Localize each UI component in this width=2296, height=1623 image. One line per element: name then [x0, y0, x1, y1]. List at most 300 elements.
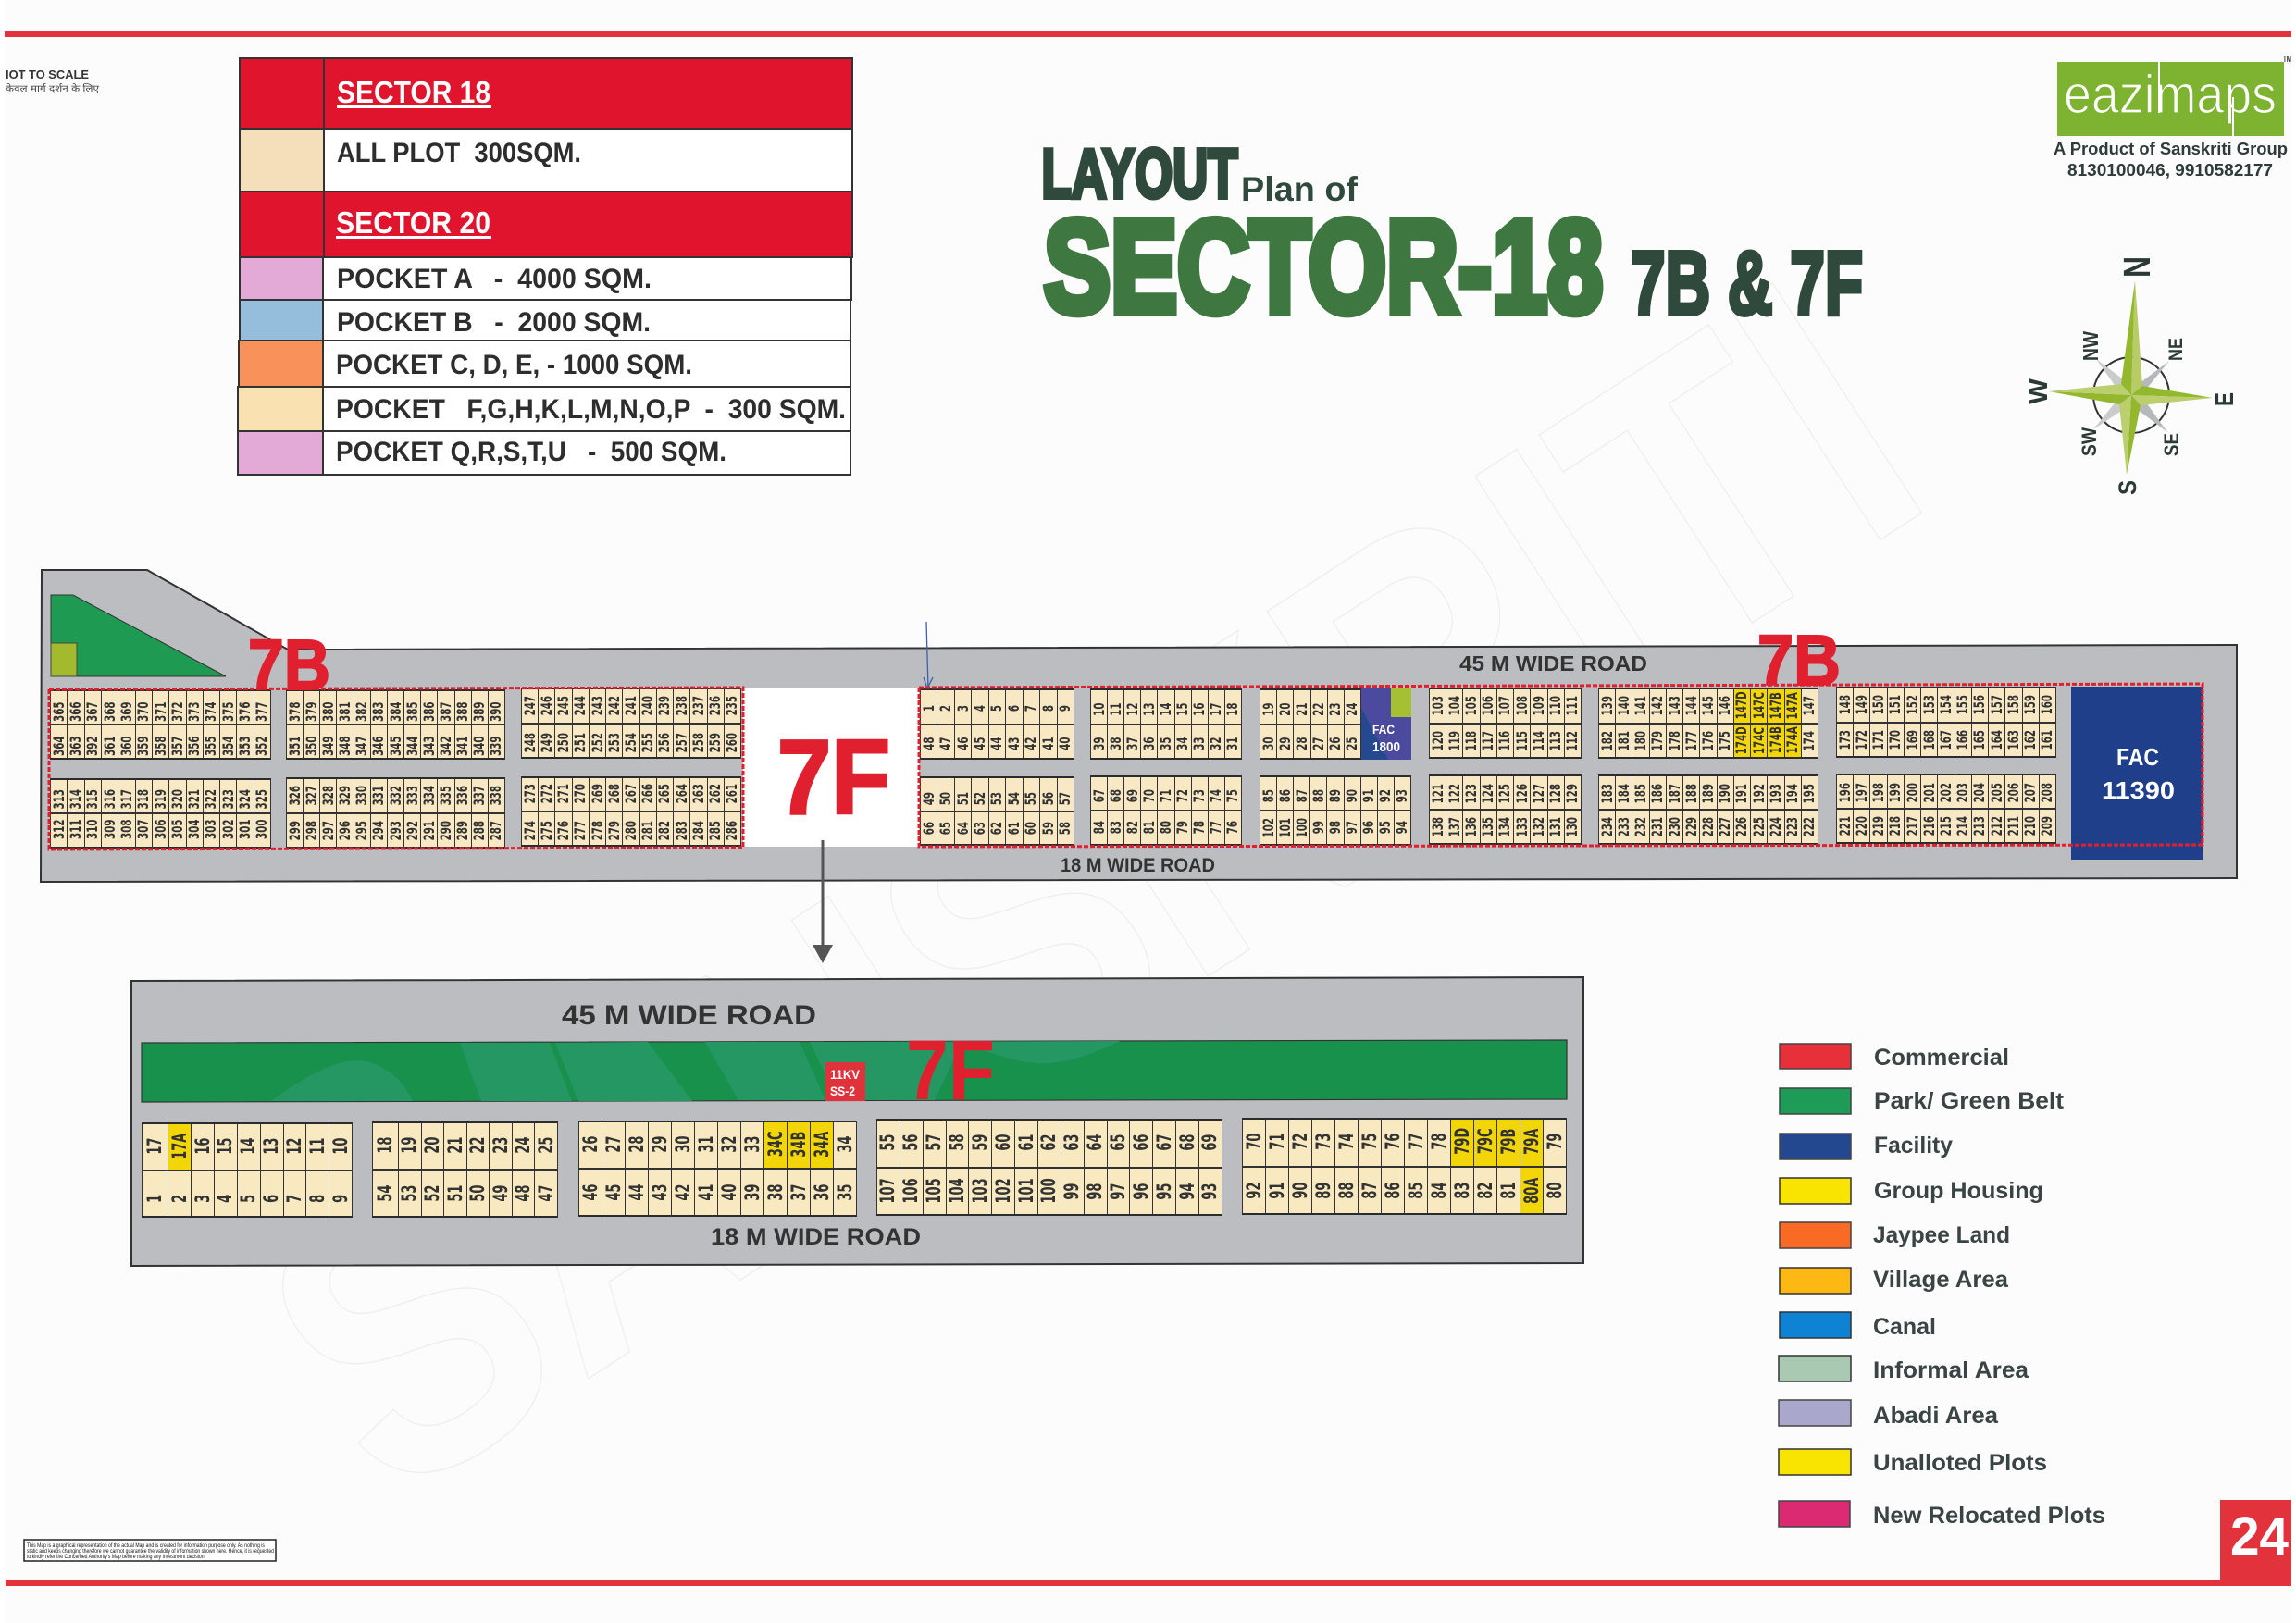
plot block: 19-24 and 30-25: 24: [1343, 702, 1360, 715]
road label: 18 m top: 18 M WIDE ROAD: [1061, 855, 1215, 876]
plot block: 67-75 and 84-76: 69: [1123, 789, 1141, 803]
plot block: 196-208 and 221-209: 208: [2038, 783, 2055, 802]
plot block: 148-160 and 173-161: 167: [1937, 730, 1955, 750]
plot block: 247-235 and 248-260: 245: [554, 696, 572, 715]
plot block: 326-338 and 299-287: 331: [369, 786, 387, 805]
plot block: 148-160 and 173-161: 153: [1920, 695, 1938, 714]
plot block: 313-325 and 312-300: 308: [118, 819, 135, 839]
plot block: 273-261 and 274-286: 285: [706, 821, 724, 840]
plot block: 49-57 and 66-58: 62: [987, 822, 1005, 835]
plot block: 183-195 and 234-222: 225: [1750, 817, 1768, 836]
plot block: 247-235 and 248-260: 238: [673, 696, 690, 715]
pocket B row: [240, 300, 850, 341]
plot block: 378-390 and 351-339: 347: [353, 736, 370, 756]
detail plot block: 70-79 and 92-80: 75: [1359, 1134, 1381, 1150]
detail plot block: 70-79 and 92-80: 91: [1266, 1182, 1288, 1198]
detail plot block: 26-34 and 46-35: 39: [740, 1183, 763, 1201]
plot block: 85-93 and 102-94: 86: [1276, 789, 1294, 803]
plot block: 196-208 and 221-209: 204: [1970, 783, 1988, 802]
plot block: 247-235 and 248-260: [521, 688, 741, 759]
plot block: 378-390 and 351-339: 383: [369, 701, 387, 722]
plot block: 326-338 and 299-287: 337: [470, 786, 488, 805]
plot block: 196-208 and 221-209: [1836, 774, 2056, 844]
detail plot block: 55-69 and 107-93: 93: [1198, 1183, 1221, 1199]
plot block: 148-160 and 173-161: 156: [1970, 695, 1988, 714]
detail plot block: 17-10 and 1-9: 17A: [168, 1133, 191, 1158]
plot block: 10-18 and 39-31: 10: [1090, 702, 1108, 715]
detail plot block: 18-25 and 54-47: 51: [444, 1184, 466, 1202]
detail plot block: 70-79 and 92-80: 79: [1544, 1134, 1566, 1150]
plot block: 326-338 and 299-287: 297: [319, 821, 337, 840]
plot block: 10-18 and 39-31: 33: [1190, 737, 1208, 750]
plot block: 1-9 and 48-40: 8: [1039, 705, 1057, 712]
plot block: 326-338 and 299-287: 330: [353, 786, 370, 805]
phone numbers: 8130100046, 9910582177: [2067, 161, 2273, 180]
plot block: 378-390 and 351-339: 385: [403, 701, 421, 722]
plot block: 139-147 and 182-174: 174: [1800, 731, 1818, 750]
plot block: 365-377 and 364-352: 354: [219, 736, 237, 756]
top red rule: [5, 31, 2291, 37]
detail plot block: 55-69 and 107-93: 66: [1130, 1134, 1152, 1151]
pocket Q to U row: [238, 431, 850, 475]
plot block: 148-160 and 173-161: 150: [1869, 695, 1887, 714]
plot block: 103-111 and 120-112: 111: [1563, 696, 1581, 715]
plot block: 313-325 and 312-300: 323: [219, 789, 237, 809]
legend: village area: [1780, 1267, 2009, 1294]
plot block: 139-147 and 182-174: 174A: [1783, 727, 1801, 754]
plot block: 148-160 and 173-161: 169: [1904, 730, 1921, 750]
plot block: 313-325 and 312-300: 317: [118, 789, 135, 809]
plot block: 365-377 and 364-352: 376: [236, 701, 254, 722]
plot block: 313-325 and 312-300: 320: [168, 789, 186, 809]
plot block: 273-261 and 274-286: 280: [622, 821, 639, 840]
detail plot block: 55-69 and 107-93: 96: [1130, 1183, 1152, 1199]
label: 7B west: 7B: [248, 626, 330, 705]
plot block: 247-235 and 248-260: 242: [605, 696, 623, 715]
plot block: 139-147 and 182-174: 174C: [1750, 727, 1768, 754]
plot block: 365-377 and 364-352: 361: [101, 736, 118, 756]
panel: 7F detail: [131, 977, 1583, 1266]
plot block: 326-338 and 299-287: 334: [420, 786, 438, 805]
label: 7F detail: 7F: [906, 1023, 995, 1118]
detail plot block: 55-69 and 107-93: 106: [900, 1179, 922, 1204]
plot block: 139-147 and 182-174: 142: [1648, 696, 1666, 715]
plot block: 326-338 and 299-287: 328: [319, 786, 337, 805]
plot block: 183-195 and 234-222: 188: [1682, 784, 1700, 803]
detail plot block: 17-10 and 1-9: 2: [168, 1195, 191, 1203]
plot block: 378-390 and 351-339: 388: [453, 701, 471, 722]
plot block: 103-111 and 120-112: 103: [1429, 696, 1446, 715]
plot block: 196-208 and 221-209: 214: [1954, 816, 1971, 836]
facility 1800: [1361, 688, 1411, 760]
detail plot block: 18-25 and 54-47: 47: [535, 1184, 557, 1202]
plot block: 139-147 and 182-174: 146: [1716, 696, 1733, 715]
plot block: 378-390 and 351-339: 380: [319, 701, 337, 722]
plot block: 85-93 and 102-94: 87: [1293, 789, 1310, 803]
plot block: 148-160 and 173-161: [1836, 687, 2056, 758]
plot block: 183-195 and 234-222: 231: [1648, 817, 1666, 836]
plot block: 183-195 and 234-222: 186: [1648, 784, 1666, 803]
plot block: 19-24 and 30-25: 19: [1260, 702, 1277, 715]
detail plot block: 55-69 and 107-93: 55: [876, 1134, 899, 1151]
panel: main road strip: [41, 570, 2237, 882]
plot block: 139-147 and 182-174: 147C: [1750, 692, 1768, 719]
plot block: 1-9 and 48-40: 2: [937, 705, 954, 712]
facility 1800: 1800: [1372, 739, 1400, 755]
plot block: 148-160 and 173-161: 162: [2021, 730, 2039, 750]
plot block: 378-390 and 351-339: 340: [470, 736, 488, 756]
detail plot block: 70-79 and 92-80: 78: [1427, 1134, 1449, 1150]
detail plot block: 55-69 and 107-93: 103: [969, 1179, 991, 1204]
detail plot block: 26-34 and 46-35: 26: [579, 1135, 602, 1153]
plot block: 196-208 and 221-209: 215: [1937, 816, 1955, 836]
plot block: 247-235 and 248-260: 250: [554, 733, 572, 752]
plot block: 85-93 and 102-94: 92: [1376, 789, 1394, 803]
detail plot block: 55-69 and 107-93: 99: [1061, 1183, 1083, 1199]
plot block: 365-377 and 364-352: 366: [67, 701, 84, 722]
plot block: 121-129 and 138-130: 121: [1429, 784, 1446, 803]
plot block: 121-129 and 138-130: 130: [1563, 817, 1581, 836]
plot block: 313-325 and 312-300: 316: [101, 789, 118, 809]
plot block: 10-18 and 39-31: 16: [1190, 702, 1208, 715]
plot block: 378-390 and 351-339: 344: [403, 736, 421, 756]
plot block: 326-338 and 299-287: 295: [353, 821, 370, 840]
plot block: 139-147 and 182-174: 143: [1666, 696, 1683, 715]
plot block: 49-57 and 66-58: 53: [987, 792, 1005, 805]
legend: new relocated plots: New Relocated Plots: [1873, 1503, 2105, 1529]
title: layout: LAYOUT: [1042, 135, 1238, 213]
plot block: 121-129 and 138-130: 138: [1429, 817, 1446, 836]
plot block: 378-390 and 351-339: 348: [336, 736, 354, 756]
plot block: 196-208 and 221-209: 211: [2004, 816, 2022, 836]
plot block: 313-325 and 312-300: 322: [202, 789, 219, 809]
plot block: 365-377 and 364-352: 359: [134, 736, 152, 756]
plot block: 183-195 and 234-222: 234: [1598, 817, 1616, 836]
plot block: 247-235 and 248-260: 251: [571, 733, 589, 752]
plot block: 10-18 and 39-31: 11: [1107, 702, 1124, 715]
plot block: 326-338 and 299-287: 336: [453, 786, 471, 805]
plot block: 196-208 and 221-209: 199: [1886, 783, 1904, 802]
plot block: 378-390 and 351-339: 386: [420, 701, 438, 722]
detail plot block: 18-25 and 54-47: 54: [374, 1184, 396, 1202]
detail plot block: 70-79 and 92-80: 74: [1334, 1134, 1357, 1150]
plot block: 139-147 and 182-174: 144: [1682, 696, 1700, 715]
plot block: 67-75 and 84-76: 82: [1123, 821, 1141, 835]
logo: eazimaps: eazimaps: [2064, 65, 2277, 125]
plot block: 10-18 and 39-31: 15: [1173, 702, 1191, 715]
plot block: 10-18 and 39-31: 39: [1090, 737, 1108, 750]
legend: group housing: Group Housing: [1874, 1178, 2043, 1204]
detail plot block: 55-69 and 107-93: 62: [1037, 1134, 1060, 1151]
plot block: 85-93 and 102-94: 101: [1276, 818, 1294, 837]
detail plot block: 55-69 and 107-93: 68: [1176, 1134, 1198, 1151]
legend: commercial: [1780, 1044, 2009, 1071]
plot block: 378-390 and 351-339: 349: [319, 736, 337, 756]
plot size table: [238, 58, 852, 475]
plot block: 139-147 and 182-174: 140: [1615, 696, 1632, 715]
plot block: 247-235 and 248-260: 260: [723, 733, 740, 752]
plot block: 326-338 and 299-287: 292: [403, 821, 421, 840]
icon: compass rose: S: [2114, 480, 2141, 495]
plot block: 121-129 and 138-130: 131: [1546, 817, 1564, 836]
plot block: 148-160 and 173-161: 166: [1954, 730, 1971, 750]
plot block: 247-235 and 248-260: 239: [655, 696, 673, 715]
plot block: 148-160 and 173-161: 157: [1988, 695, 2005, 714]
plot block: 121-129 and 138-130: [1429, 774, 1582, 845]
detail plot block: 55-69 and 107-93: 101: [1015, 1179, 1037, 1204]
plot block: 273-261 and 274-286: 269: [589, 784, 606, 803]
all plot row: ALL PLOT 300SQM.: [337, 138, 581, 168]
plot block: 313-325 and 312-300: 311: [67, 819, 84, 839]
detail plot block: 55-69 and 107-93: 102: [992, 1179, 1014, 1204]
plot block: 313-325 and 312-300: 305: [168, 819, 186, 839]
plot block: 247-235 and 248-260: 241: [622, 696, 639, 715]
plot block: 85-93 and 102-94: 91: [1359, 789, 1377, 803]
plot block: 326-338 and 299-287: 298: [303, 821, 320, 840]
plot block: 247-235 and 248-260: 248: [521, 733, 539, 752]
detail plot block: 55-69 and 107-93: 95: [1153, 1183, 1175, 1199]
plot block: 313-325 and 312-300: 313: [50, 789, 68, 809]
detail plot block: 17-10 and 1-9: 17: [143, 1137, 166, 1154]
plot block: 247-235 and 248-260: 256: [655, 733, 673, 752]
plot block: 85-93 and 102-94: 93: [1393, 789, 1410, 803]
legend: commercial: Commercial: [1874, 1045, 2009, 1071]
plot block: 49-57 and 66-58: 54: [1005, 792, 1023, 805]
plot block: 148-160 and 173-161: 173: [1836, 730, 1854, 750]
plot block: 273-261 and 274-286: 267: [622, 784, 639, 803]
detail plot block: 18-25 and 54-47: 49: [490, 1184, 512, 1202]
plot block: 49-57 and 66-58: 64: [954, 822, 972, 835]
plot block: 365-377 and 364-352: 369: [118, 701, 135, 722]
plot block: 183-195 and 234-222: 228: [1699, 817, 1717, 836]
detail plot block: 17-10 and 1-9: 14: [237, 1137, 259, 1154]
plot block: 148-160 and 173-161: 154: [1937, 695, 1955, 714]
plot block: 1-9 and 48-40: 4: [971, 705, 988, 712]
plot block: 196-208 and 221-209: 205: [1988, 783, 2005, 802]
facility 11390: FAC: [2116, 743, 2159, 771]
plot block: 247-235 and 248-260: 258: [689, 733, 707, 752]
plot block: 273-261 and 274-286: 279: [605, 821, 623, 840]
detail plot block: 26-34 and 46-35: 41: [694, 1183, 716, 1201]
detail plot block: 55-69 and 107-93: 94: [1176, 1183, 1198, 1199]
plot block: 326-338 and 299-287: 333: [403, 786, 421, 805]
pocket Q to U row: POCKET Q,R,S,T,U - 500 SQM.: [336, 437, 726, 467]
detail plot block: 70-79 and 92-80: 80: [1544, 1182, 1566, 1198]
detail plot block: 55-69 and 107-93: 63: [1061, 1134, 1083, 1151]
detail plot block: 70-79 and 92-80: 77: [1405, 1134, 1427, 1150]
plot block: 326-338 and 299-287: 291: [420, 821, 438, 840]
plot block: 10-18 and 39-31: 34: [1173, 737, 1191, 750]
plot block: 273-261 and 274-286: 272: [538, 784, 555, 803]
detail plot block: 70-79 and 92-80: [1242, 1118, 1567, 1215]
plot block: 103-111 and 120-112: 115: [1513, 731, 1531, 750]
pen mark: [924, 622, 933, 688]
plot block: 365-377 and 364-352: 358: [152, 736, 169, 756]
detail plot block: 18-25 and 54-47: 19: [398, 1136, 420, 1154]
plot block: 365-377 and 364-352: 353: [236, 736, 254, 756]
legend: jaypee land: Jaypee Land: [1873, 1222, 2010, 1248]
detail plot block: 18-25 and 54-47: 20: [421, 1136, 443, 1154]
plot block: 67-75 and 84-76: 83: [1107, 821, 1124, 835]
plot block: 1-9 and 48-40: 7: [1022, 705, 1039, 712]
title: plan of: Plan of: [1241, 170, 1359, 208]
plot block: 67-75 and 84-76: 76: [1223, 821, 1241, 835]
plot block: 196-208 and 221-209: 213: [1970, 816, 1988, 836]
plot block: 148-160 and 173-161: 170: [1886, 730, 1904, 750]
detail plot block: 70-79 and 92-80: 80A: [1520, 1177, 1542, 1203]
plot block: 196-208 and 221-209: 198: [1869, 783, 1887, 802]
legend: abadi area: Abadi Area: [1873, 1403, 1999, 1429]
plot block: 326-338 and 299-287: [286, 777, 505, 849]
plot block: 196-208 and 221-209: 207: [2021, 783, 2039, 802]
detail plot block: 26-34 and 46-35: 42: [672, 1183, 694, 1201]
legend: canal: Canal: [1873, 1314, 1936, 1340]
plot block: 183-195 and 234-222: 193: [1767, 784, 1784, 803]
plot block: 67-75 and 84-76: 77: [1207, 821, 1224, 835]
plot block: 49-57 and 66-58: 58: [1056, 822, 1074, 835]
plot block: 313-325 and 312-300: 321: [185, 789, 203, 809]
boundary: 7B west: [49, 688, 743, 849]
detail plot block: 26-34 and 46-35: 27: [602, 1135, 624, 1153]
company line: A Product of Sanskriti Group: [2054, 139, 2288, 158]
legend: facility: [1780, 1133, 1953, 1159]
page number tag: [2220, 1500, 2291, 1586]
detail plot block: 26-34 and 46-35: 29: [648, 1135, 670, 1153]
plot block: 121-129 and 138-130: 122: [1446, 784, 1463, 803]
detail plot block: 26-34 and 46-35: 34B: [787, 1131, 809, 1158]
substation 11KV SS-2: SS-2: [830, 1084, 855, 1098]
plot block: 273-261 and 274-286: 273: [521, 784, 539, 803]
plot block: 49-57 and 66-58: 50: [937, 792, 954, 805]
plot block: 183-195 and 234-222: 185: [1632, 784, 1649, 803]
detail plot block: 70-79 and 92-80: 90: [1288, 1182, 1310, 1198]
plot block: 148-160 and 173-161: 159: [2021, 695, 2039, 714]
detail plot block: 26-34 and 46-35: 36: [811, 1183, 833, 1201]
plot block: 10-18 and 39-31: [1090, 688, 1242, 760]
plot block: 121-129 and 138-130: 134: [1496, 817, 1513, 836]
pocket C D E row: [239, 341, 850, 387]
plot block: 1-9 and 48-40: 5: [987, 705, 1005, 712]
plot block: 326-338 and 299-287: 296: [336, 821, 354, 840]
plot block: 196-208 and 221-209: 209: [2038, 816, 2055, 836]
plot block: 85-93 and 102-94: 98: [1326, 821, 1344, 835]
detail plot block: 26-34 and 46-35: 46: [579, 1183, 602, 1201]
plot block: 273-261 and 274-286: 274: [521, 821, 539, 840]
plot block: 273-261 and 274-286: 283: [673, 821, 690, 840]
plot block: 148-160 and 173-161: 163: [2004, 730, 2022, 750]
plot block: 326-338 and 299-287: 338: [487, 786, 504, 805]
legend: facility: Facility: [1874, 1133, 1953, 1158]
icon: compass rose: W: [2024, 378, 2054, 404]
plot block: 313-325 and 312-300: 315: [83, 789, 101, 809]
plot block: 85-93 and 102-94: 102: [1260, 818, 1277, 837]
plot block: 273-261 and 274-286: 262: [706, 784, 724, 803]
plot block: 196-208 and 221-209: 217: [1904, 816, 1921, 836]
detail plot block: 70-79 and 92-80: 70: [1242, 1134, 1264, 1150]
plot block: 67-75 and 84-76: 79: [1173, 821, 1191, 835]
plot block: 139-147 and 182-174: 147A: [1783, 692, 1801, 719]
watermark: SANSKRITI: [193, 199, 1987, 1580]
legend: group housing: [1780, 1178, 2043, 1204]
plot block: 196-208 and 221-209: 221: [1836, 816, 1854, 836]
plot block: 10-18 and 39-31: 14: [1157, 702, 1174, 715]
plot block: 121-129 and 138-130: 125: [1496, 784, 1513, 803]
plot block: 326-338 and 299-287: 335: [437, 786, 454, 805]
plot block: 1-9 and 48-40: 42: [1022, 737, 1039, 750]
plot block: 183-195 and 234-222: 195: [1800, 784, 1818, 803]
plot block: 365-377 and 364-352: 370: [134, 701, 152, 722]
plot block: 19-24 and 30-25: 20: [1276, 702, 1294, 715]
plot block: 121-129 and 138-130: 128: [1546, 784, 1564, 803]
plot block: 183-195 and 234-222: 189: [1699, 784, 1717, 803]
plot block: 247-235 and 248-260: 254: [622, 733, 639, 752]
plot block: 121-129 and 138-130: 124: [1479, 784, 1496, 803]
plot block: 121-129 and 138-130: 129: [1563, 784, 1581, 803]
road label: 45 m detail: 45 M WIDE ROAD: [562, 1000, 816, 1031]
plot block: 196-208 and 221-209: 196: [1836, 783, 1854, 802]
legend: jaypee land: [1780, 1222, 2010, 1248]
plot block: 273-261 and 274-286: 284: [689, 821, 707, 840]
plot block: 273-261 and 274-286: 276: [554, 821, 572, 840]
plot block: 19-24 and 30-25: 28: [1293, 737, 1310, 750]
plot block: 103-111 and 120-112: 106: [1479, 696, 1496, 715]
plot block: 378-390 and 351-339: 342: [437, 736, 454, 756]
plot block: 183-195 and 234-222: 187: [1666, 784, 1683, 803]
detail plot block: 26-34 and 46-35: 43: [648, 1183, 670, 1201]
detail plot block: 55-69 and 107-93: 97: [1107, 1183, 1129, 1199]
detail plot block: 17-10 and 1-9: 9: [329, 1195, 352, 1203]
detail plot block: 26-34 and 46-35: [578, 1121, 857, 1217]
detail plot block: 18-25 and 54-47: [372, 1121, 558, 1218]
detail plot block: 70-79 and 92-80: 79D: [1451, 1128, 1473, 1155]
plot block: 326-338 and 299-287: 287: [487, 821, 504, 840]
detail plot block: 55-69 and 107-93: [876, 1119, 1222, 1216]
detail plot block: 70-79 and 92-80: 89: [1312, 1182, 1334, 1198]
plot block: 85-93 and 102-94: 89: [1326, 789, 1344, 803]
plot block: 273-261 and 274-286: 264: [673, 784, 690, 803]
plot block: 121-129 and 138-130: 132: [1530, 817, 1547, 836]
legend: new relocated plots: [1779, 1501, 2105, 1529]
map legend: [1779, 1044, 2105, 1529]
plot block: 49-57 and 66-58: 55: [1022, 792, 1039, 805]
plot block: 19-24 and 30-25: 26: [1326, 737, 1344, 750]
plot block: 67-75 and 84-76: 67: [1090, 789, 1108, 803]
plot block: 365-377 and 364-352: 355: [202, 736, 219, 756]
detail plot block: 55-69 and 107-93: 64: [1084, 1134, 1106, 1151]
plot block: 10-18 and 39-31: 13: [1140, 702, 1158, 715]
plot block: 103-111 and 120-112: 117: [1479, 731, 1496, 750]
plot block: 196-208 and 221-209: 206: [2004, 783, 2022, 802]
plot block: 19-24 and 30-25: [1260, 688, 1361, 760]
sector 18 header: [240, 58, 852, 129]
detail plot block: 55-69 and 107-93: 65: [1107, 1134, 1129, 1151]
plot block: 183-195 and 234-222: 229: [1682, 817, 1700, 836]
plot block: 139-147 and 182-174: 181: [1615, 731, 1632, 750]
plot block: 365-377 and 364-352: 392: [83, 736, 101, 756]
plot block: 1-9 and 48-40: 47: [937, 737, 954, 750]
plot block: 378-390 and 351-339: 351: [286, 736, 304, 756]
plot block: 365-377 and 364-352: 367: [83, 701, 101, 722]
plot block: 313-325 and 312-300: 309: [101, 819, 118, 839]
plot block: 378-390 and 351-339: 381: [336, 701, 354, 722]
plot block: 103-111 and 120-112: 120: [1429, 731, 1446, 750]
plot block: 247-235 and 248-260: 253: [605, 733, 623, 752]
plot block: 247-235 and 248-260: 240: [639, 696, 656, 715]
plot block: 49-57 and 66-58: 59: [1039, 822, 1057, 835]
plot block: 49-57 and 66-58: 56: [1039, 792, 1057, 805]
plot block: 313-325 and 312-300: 307: [134, 819, 152, 839]
plot block: 365-377 and 364-352: 374: [202, 701, 219, 722]
